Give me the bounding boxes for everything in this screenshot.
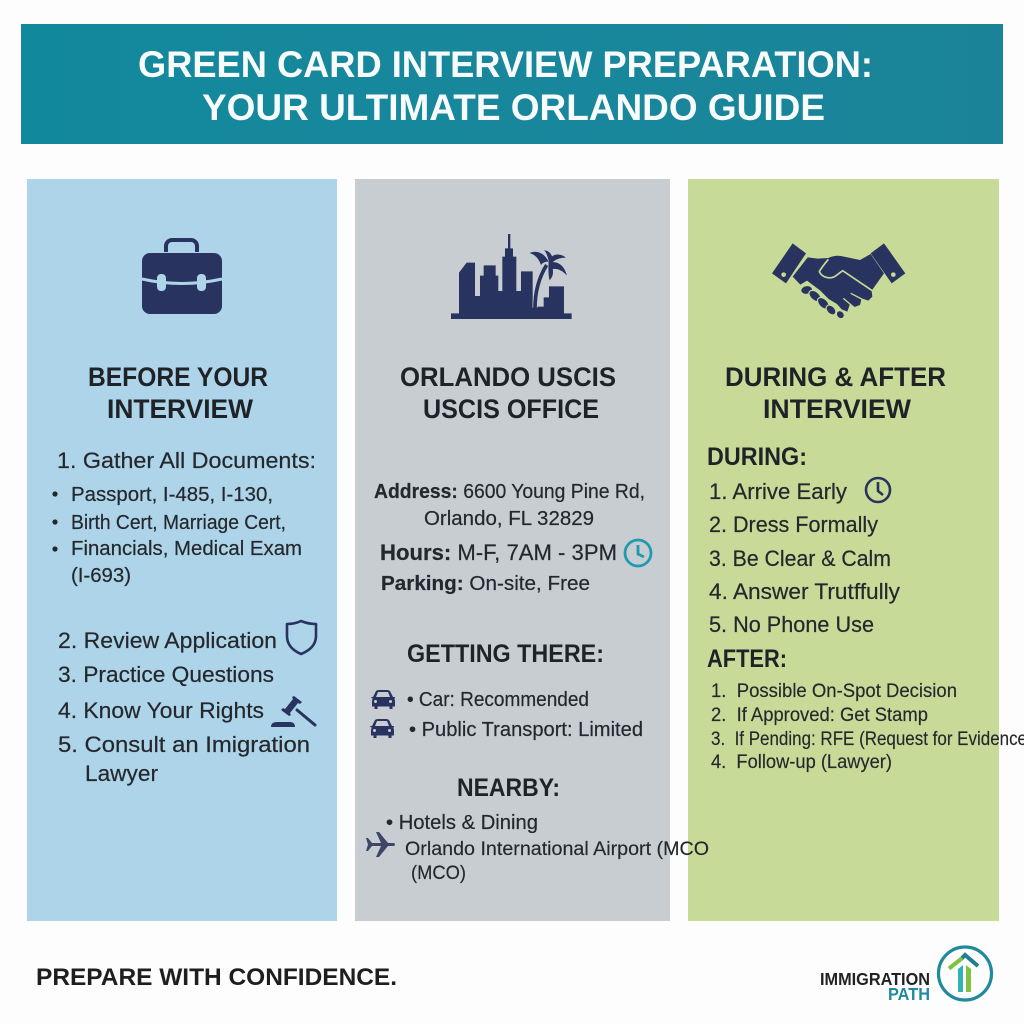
text: address, hours, parking: [374, 480, 645, 595]
icon: clock teal: [625, 540, 651, 566]
logo: Immigration Path: [820, 947, 992, 1004]
heading: during and after interview: [725, 362, 946, 424]
text: address, hours, parking: Parking: On-site, Free: [381, 572, 590, 595]
icon: clock dark: [866, 478, 890, 502]
text: nearby places: (MCO): [411, 863, 466, 884]
icon: car one: [371, 690, 395, 709]
icon: gavel: [271, 696, 315, 727]
icon: airplane: [366, 832, 395, 857]
text: address, hours, parking: Orlando, FL 32829: [424, 507, 594, 530]
text: address, hours, parking: Hours: M-F, 7AM - 3PM: [380, 540, 617, 565]
logo: Immigration Path: PATH: [888, 984, 930, 1004]
text: numbered steps: 3. Practice Questions: [58, 662, 274, 687]
heading: before your interview: INTERVIEW: [107, 394, 254, 424]
footer tagline: PREPARE WITH CONFIDENCE.: [36, 964, 397, 991]
heading: after: AFTER:: [707, 645, 787, 673]
title banner: YOUR ULTIMATE ORLANDO GUIDE: [202, 86, 825, 128]
text: transport options: [407, 689, 643, 741]
text: during steps: [709, 479, 901, 637]
text: address, hours, parking: Address: 6600 Young Pine Rd,: [374, 480, 645, 503]
text: nearby places: Orlando International Airport (MCO: [405, 839, 709, 860]
heading: before your interview: BEFORE YOUR: [88, 362, 268, 392]
text: during steps: 4. Answer Trutffully: [709, 579, 901, 604]
text: nearby places: [386, 811, 709, 884]
heading: Orlando USCIS office: ORLANDO USCIS: [400, 362, 616, 392]
logo: Immigration Path: IMMIGRATION: [820, 969, 930, 989]
text: numbered steps: 2. Review Application: [58, 628, 277, 653]
text: during steps: 1. Arrive Early: [709, 479, 848, 504]
icon: handshake: [772, 243, 905, 320]
heading: before your interview: [88, 362, 268, 424]
text: gather all documents: Financials, Medical Exam: [71, 537, 302, 560]
text: during steps: 2. Dress Formally: [709, 512, 879, 537]
text: after steps: 1. Possible On-Spot Decision: [711, 681, 957, 702]
icon: car two: [370, 719, 394, 738]
heading: during and after interview: INTERVIEW: [763, 394, 912, 424]
text: transport options: • Car: Recommended: [407, 689, 589, 711]
text: during steps: 5. No Phone Use: [709, 612, 874, 637]
panel: before your interview: [27, 179, 337, 921]
text: gather all documents: [52, 448, 316, 587]
heading: getting there: GETTING THERE:: [407, 640, 604, 668]
text: nearby places: • Hotels & Dining: [386, 811, 538, 834]
text: gather all documents: Passport, I-485, I-130,: [71, 483, 273, 506]
text: after steps: 2. If Approved: Get Stamp: [711, 705, 928, 726]
heading: Orlando USCIS office: [400, 362, 616, 424]
heading: nearby: NEARBY:: [457, 774, 560, 802]
text: numbered steps: 5. Consult an Imigration: [58, 732, 310, 757]
text: gather all documents: (I-693): [71, 564, 131, 587]
text: gather all documents: Birth Cert, Marriage Cert,: [71, 511, 286, 534]
panel: Orlando USCIS office: [355, 179, 709, 921]
icon: city skyline with palm: [451, 234, 572, 319]
text: numbered steps: [58, 628, 310, 786]
icon: briefcase: [142, 240, 222, 314]
text: numbered steps: 4. Know Your Rights: [58, 698, 264, 723]
heading: during: DURING:: [707, 443, 807, 471]
text: numbered steps: Lawyer: [85, 761, 158, 786]
text: gather all documents: 1. Gather All Documents:: [57, 448, 316, 473]
text: after steps: [711, 681, 1024, 773]
text: after steps: 4. Follow-up (Lawyer): [711, 752, 892, 773]
text: during steps: 3. Be Clear & Calm: [709, 546, 891, 571]
title banner: GREEN CARD INTERVIEW PREPARATION:: [138, 43, 873, 85]
heading: Orlando USCIS office: USCIS OFFICE: [423, 394, 599, 424]
title banner: [21, 24, 1003, 144]
heading: during and after interview: DURING & AFTER: [725, 362, 946, 392]
text: transport options: • Public Transport: Limited: [409, 719, 643, 741]
panel: during and after interview: [688, 179, 1024, 921]
icon: shield: [287, 621, 316, 654]
